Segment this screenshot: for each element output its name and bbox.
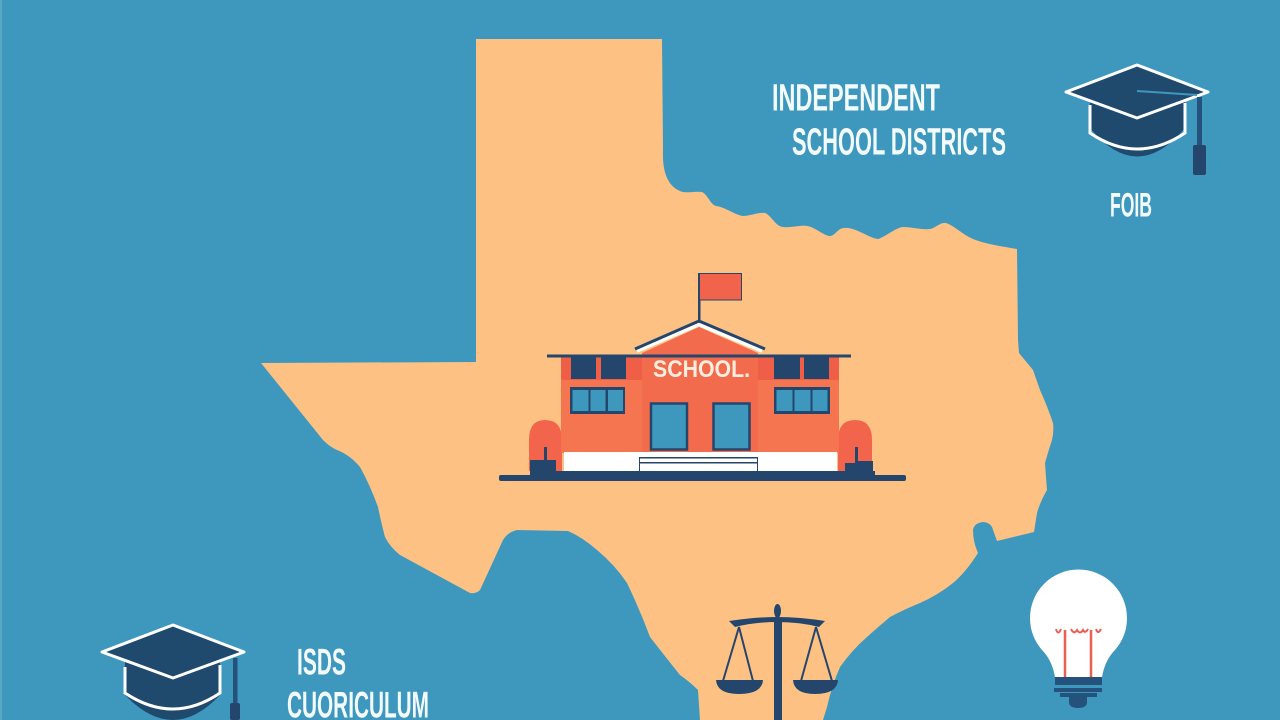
- heading: independent school districts: SCHOOL DISTRICTS: [792, 122, 1006, 164]
- icon: graduation cap top right: [1066, 65, 1208, 175]
- school flag: [698, 273, 742, 323]
- icon: school building: [499, 273, 906, 481]
- label: ISDS curriculum: [287, 642, 429, 720]
- heading: independent school districts: INDEPENDENT: [772, 78, 940, 120]
- icon: scales of justice: [716, 604, 838, 720]
- school sign: SCHOOL.: [653, 356, 750, 383]
- map: Texas silhouette: [261, 39, 1053, 720]
- upper windows: [571, 357, 829, 379]
- white base and steps: [564, 452, 837, 471]
- bulb base: [1054, 677, 1102, 708]
- label: FOIB: FOIB: [1110, 186, 1152, 224]
- building walls: [561, 327, 839, 453]
- roof and eaves: [547, 321, 851, 358]
- lower windows: [570, 387, 830, 414]
- bushes: [529, 420, 873, 473]
- filament: [1056, 629, 1101, 677]
- doors: [651, 404, 750, 450]
- heading: independent school districts: [772, 78, 1006, 164]
- ground line: [499, 471, 906, 481]
- icon: light bulb: [1030, 570, 1127, 708]
- icon: graduation cap bottom left: [102, 625, 244, 720]
- label: ISDS curriculum: ISDS: [297, 642, 346, 682]
